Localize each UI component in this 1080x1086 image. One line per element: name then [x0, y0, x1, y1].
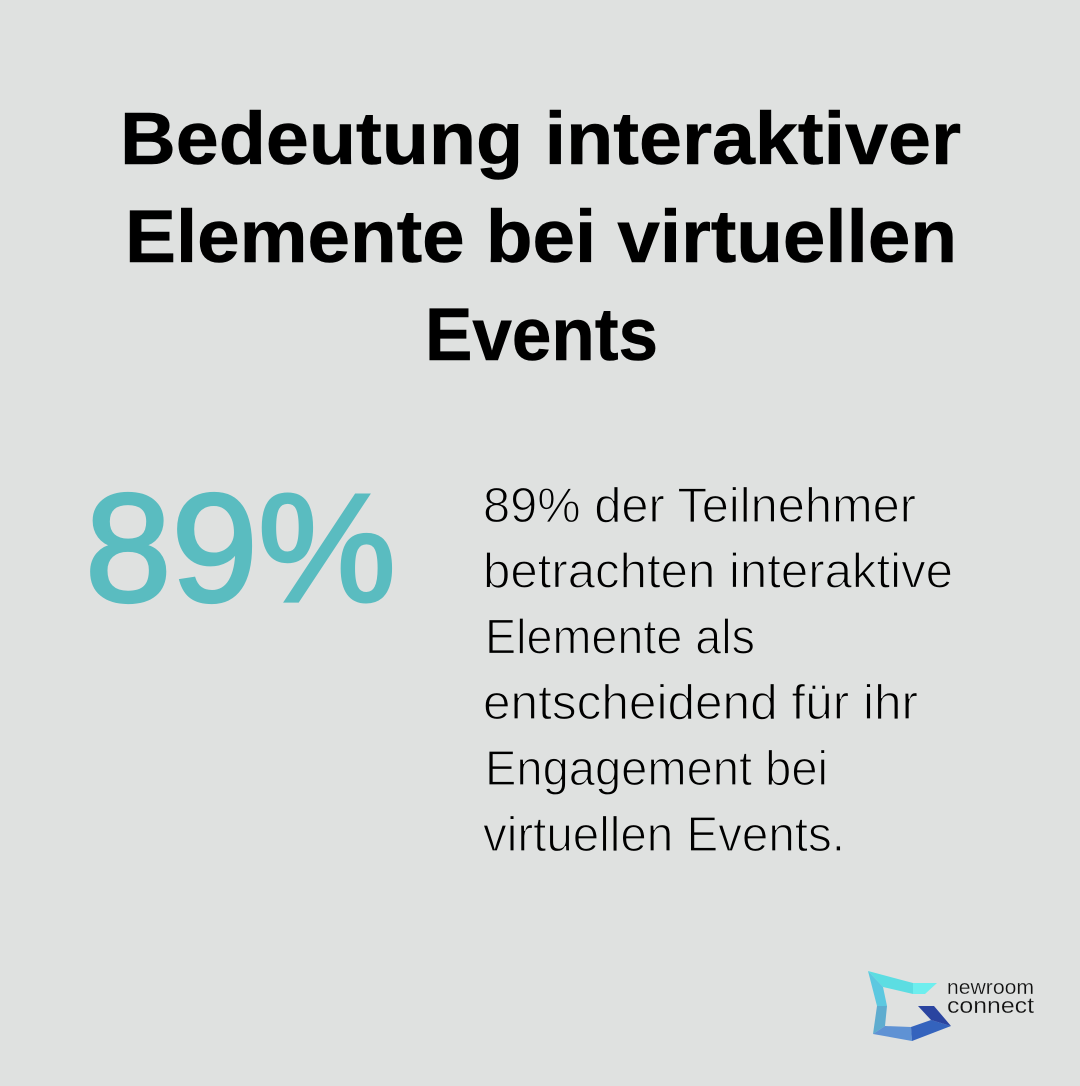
icon: logo mark: [868, 971, 951, 1041]
title: Elemente bei virtuellen: [125, 195, 957, 278]
title: Bedeutung interaktiver: [120, 97, 961, 180]
description text: Elemente als: [485, 610, 755, 664]
title: [120, 97, 961, 376]
brand name: [947, 976, 1034, 1018]
description text: entscheidend für ihr: [483, 676, 918, 730]
title: Events: [425, 293, 658, 376]
description text: virtuellen Events.: [483, 808, 845, 862]
big statistic: 89%: 89%: [85, 462, 396, 634]
brand name: newroom: [947, 976, 1034, 999]
description text: [483, 479, 953, 862]
description text: Engagement bei: [485, 742, 828, 796]
description text: 89% der Teilnehmer: [483, 479, 916, 533]
logo: newroom connect: [868, 971, 1034, 1041]
brand name: connect: [947, 993, 1034, 1018]
description text: betrachten interaktive: [483, 545, 953, 599]
